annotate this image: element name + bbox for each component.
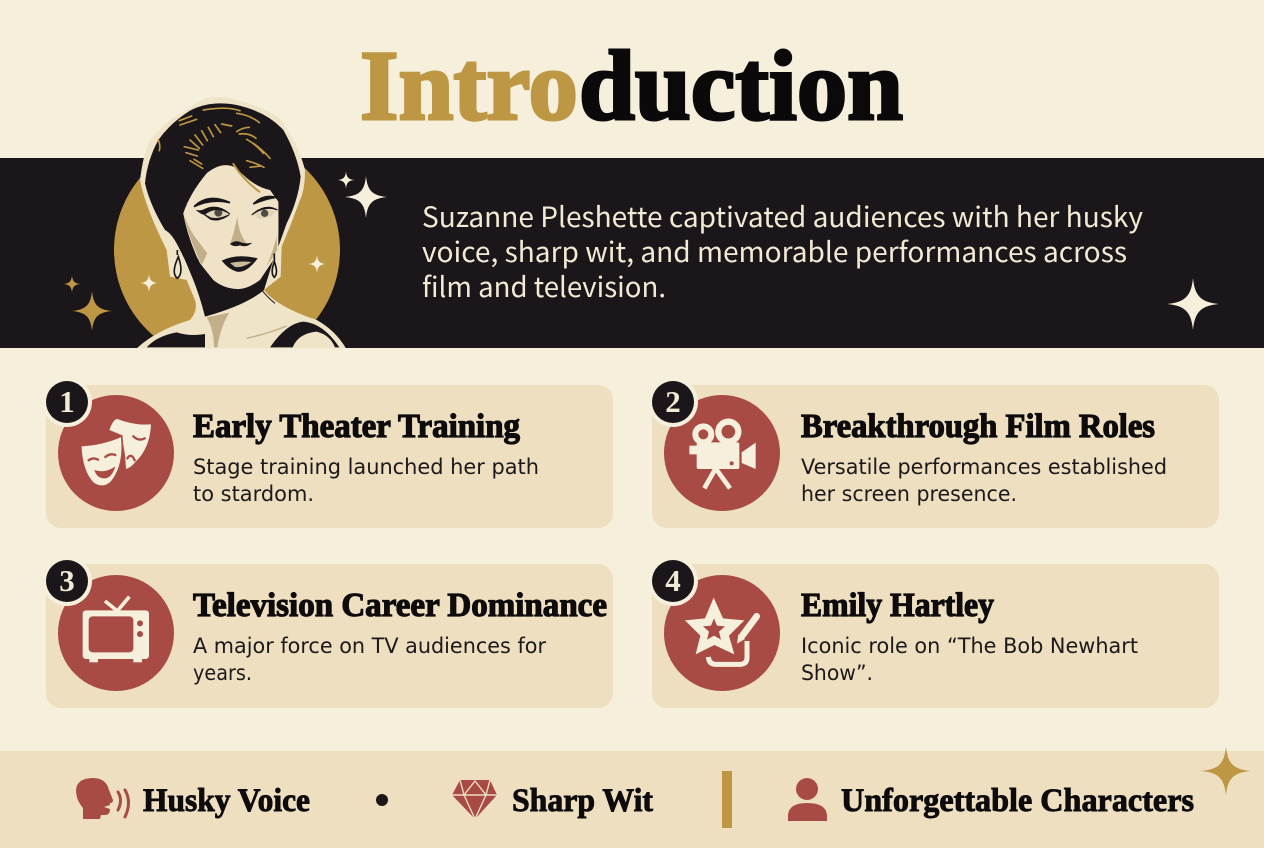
label: sharp wit: Sharp Wit <box>512 783 653 819</box>
description: her screen presence. <box>801 482 1017 506</box>
icon: diamond <box>452 780 497 819</box>
description <box>193 634 546 685</box>
description <box>801 634 1138 685</box>
panel: card 1 theater training <box>42 377 613 528</box>
title <box>360 30 903 141</box>
earrings <box>167 232 179 255</box>
intro paragraph: Suzanne Pleshette captivated audiences with her husky <box>422 196 1143 236</box>
number badge 2 <box>648 377 698 427</box>
dark intro band <box>0 158 1264 348</box>
icon: person <box>788 778 827 821</box>
description: to stardom. <box>193 482 314 506</box>
description: years. <box>193 661 252 685</box>
panel: footer strip <box>0 746 1264 848</box>
number badge 2: 2 <box>665 384 681 419</box>
heading: Breakthrough Film Roles <box>801 408 1155 445</box>
gold divider bar <box>722 771 732 828</box>
portrait: woman with gold circle <box>114 97 346 363</box>
label: unforgettable characters: Unforgettable Characters <box>841 783 1194 819</box>
icon: star and pencil <box>685 598 757 664</box>
title: duction <box>579 30 903 141</box>
description: Versatile performances established <box>801 455 1167 479</box>
number badge 3: 3 <box>59 563 75 598</box>
number badge 3 <box>42 556 92 606</box>
hair highlights <box>158 108 270 192</box>
number badge 4 <box>648 556 698 606</box>
description: Iconic role on “The Bob Newhart <box>801 634 1138 658</box>
panel: card 3 television <box>42 556 613 708</box>
face features <box>194 196 276 207</box>
number badge 1: 1 <box>59 384 75 419</box>
heading: Television Career Dominance <box>193 587 607 624</box>
number badge 1 <box>42 377 92 427</box>
description: Show”. <box>801 661 873 685</box>
heading: Emily Hartley <box>801 587 994 624</box>
panel: card 4 Emily Hartley <box>648 556 1219 708</box>
description: A major force on TV audiences for <box>193 634 546 658</box>
separator dot <box>376 794 388 806</box>
intro paragraph: voice, sharp wit, and memorable performances across <box>422 231 1127 271</box>
label: husky voice: Husky Voice <box>143 783 310 819</box>
title: Intro <box>360 30 578 141</box>
number badge 4: 4 <box>665 563 681 598</box>
icon: film camera <box>689 422 756 488</box>
description <box>801 455 1167 506</box>
description <box>193 455 539 506</box>
heading: Early Theater Training <box>193 408 520 445</box>
icon: speaking head <box>76 778 128 819</box>
panel: card 2 film roles <box>648 377 1219 528</box>
intro paragraph: film and television. <box>422 266 666 306</box>
icon: gold sparkle <box>1202 746 1250 796</box>
intro paragraph <box>422 196 1143 306</box>
sparkles on band <box>64 172 1219 331</box>
icon: theater masks <box>81 419 151 486</box>
description: Stage training launched her path <box>193 455 539 479</box>
icon: television <box>83 597 149 662</box>
